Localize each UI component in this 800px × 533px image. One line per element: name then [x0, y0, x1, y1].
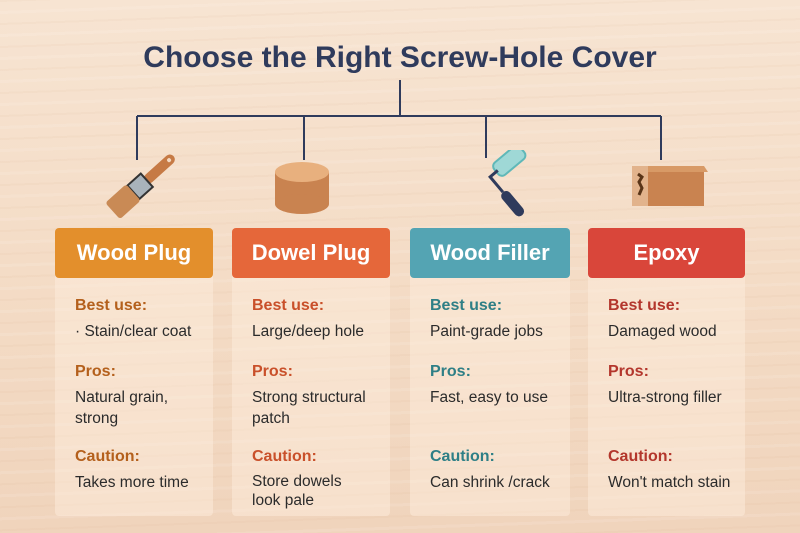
panel: dowel plug [232, 228, 390, 516]
panel: dowel plug: Caution: [252, 448, 317, 465]
panel: wood filler [410, 228, 570, 516]
panel: wood plug: Pros: [75, 363, 116, 380]
icon: paintbrush [106, 154, 175, 218]
panel: wood plug: Caution: [75, 448, 140, 465]
panel: epoxy: Caution: [608, 448, 673, 465]
panel: wood filler: Can shrink /crack [430, 474, 550, 491]
header: dowel plug: Dowel Plug [252, 240, 370, 265]
panel: epoxy: Won't match stain [608, 474, 730, 491]
panel: wood filler: Paint-grade jobs [430, 323, 543, 340]
icon: paint roller [488, 150, 526, 216]
panel: dowel plug: Store dowels [252, 473, 342, 490]
panel: dowel plug: look pale [252, 492, 314, 509]
panel: wood plug [55, 228, 213, 516]
title: Choose the Right Screw-Hole Cover [143, 41, 657, 74]
header: wood filler [410, 228, 570, 278]
header: epoxy: Epoxy [633, 240, 700, 265]
panel: wood filler: Best use: [430, 297, 502, 314]
panel: wood plug: · Stain/clear coat [75, 323, 191, 340]
icon: damaged wood block [632, 166, 708, 206]
panel: epoxy [588, 228, 745, 516]
panel: dowel plug: Best use: [252, 297, 324, 314]
header: wood filler: Wood Filler [430, 240, 550, 265]
panel: dowel plug: Pros: [252, 363, 293, 380]
panel: epoxy: Damaged wood [608, 323, 717, 340]
panel: wood filler: Fast, easy to use [430, 389, 548, 406]
header: epoxy [588, 228, 745, 278]
panel: dowel plug: Strong structural [252, 389, 366, 406]
panel: wood plug: Best use: [75, 297, 147, 314]
panel: wood plug: strong [75, 410, 118, 427]
panel: wood plug: Natural grain, [75, 389, 168, 406]
icon: dowel [275, 162, 329, 214]
panel: wood filler: Caution: [430, 448, 495, 465]
header: dowel plug [232, 228, 390, 278]
panel: dowel plug: Large/deep hole [252, 323, 364, 340]
header: wood plug: Wood Plug [77, 240, 191, 265]
panel: epoxy: Pros: [608, 363, 649, 380]
panel: dowel plug: patch [252, 410, 290, 427]
panel: epoxy: Ultra-strong filler [608, 389, 722, 406]
panel: wood plug: Takes more time [75, 474, 189, 491]
panel: epoxy: Best use: [608, 297, 680, 314]
panel: wood filler: Pros: [430, 363, 471, 380]
header: wood plug [55, 228, 213, 278]
